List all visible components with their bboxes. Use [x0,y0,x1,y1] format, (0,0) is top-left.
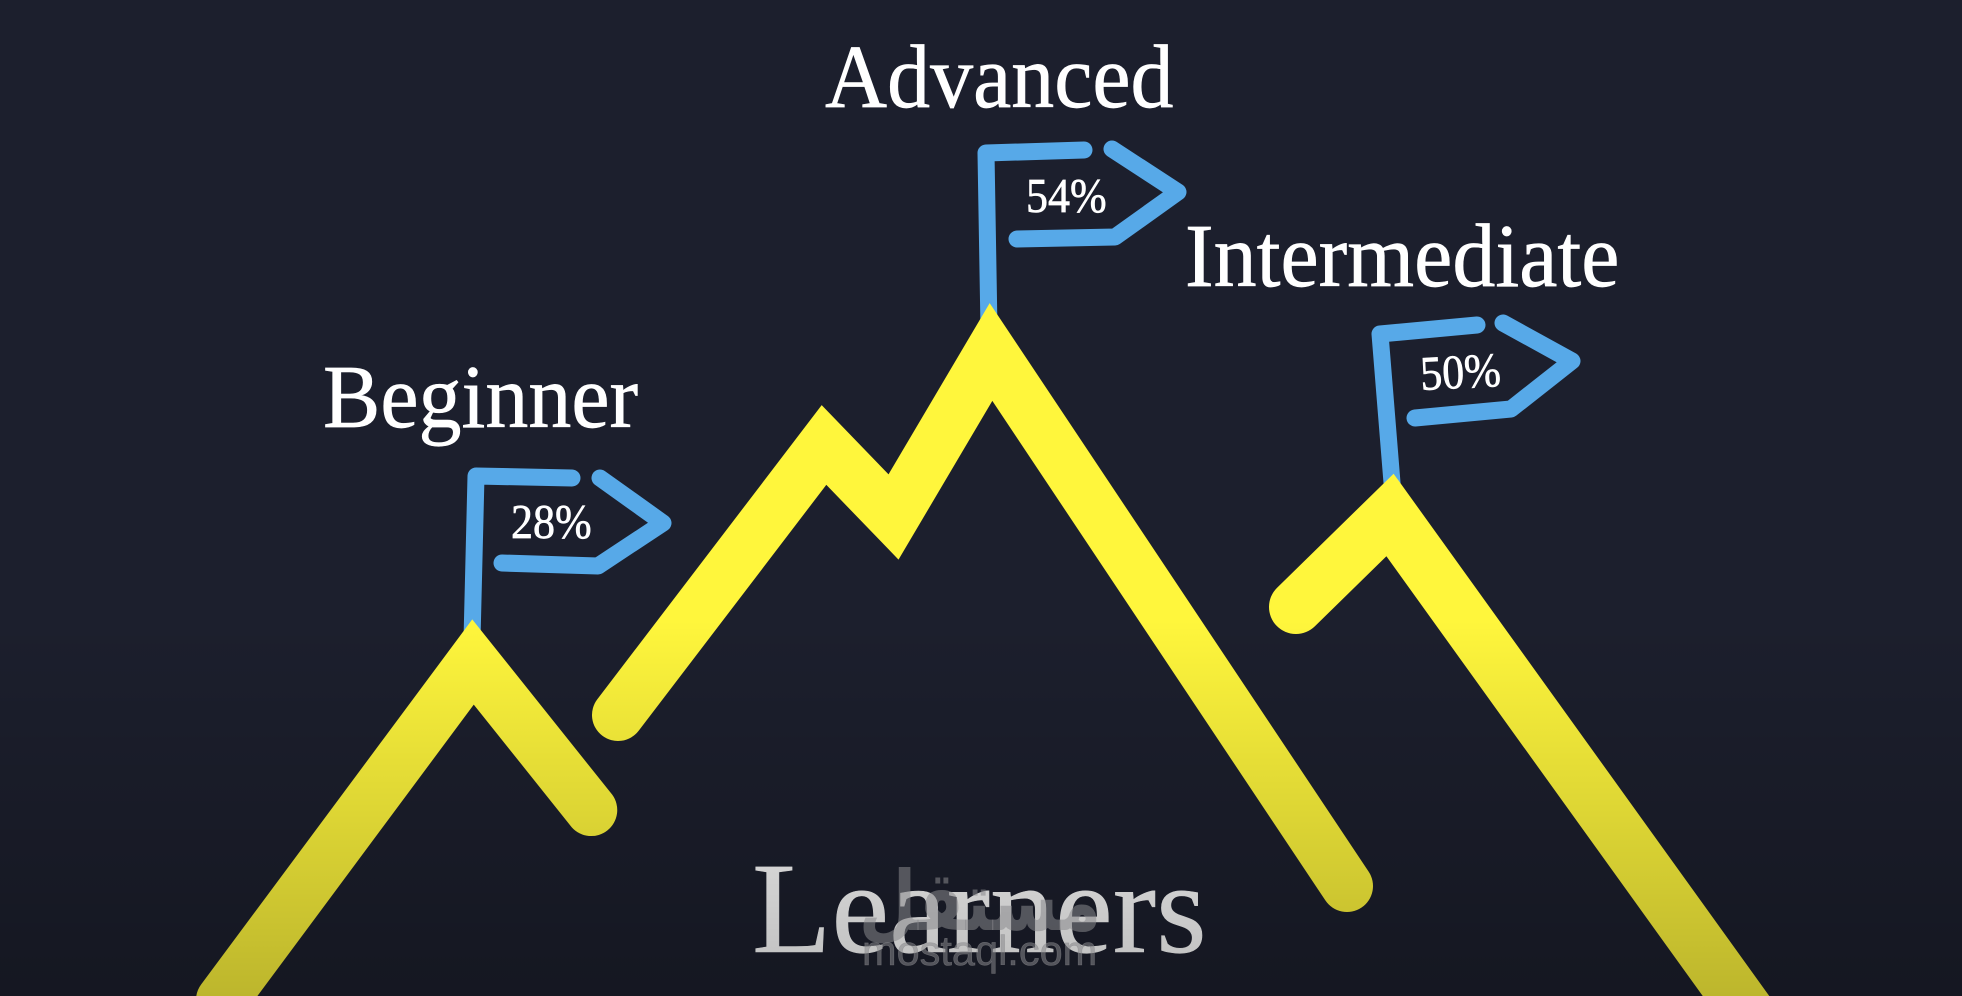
mountain: beginner peak [196,619,617,996]
heading: Beginner: Beginner [323,347,638,447]
watermark: mostaql.com [862,927,1097,974]
mountain: advanced peak [618,352,1347,886]
value: 50%: 50% [1419,344,1502,401]
value: 28%: 28% [511,496,592,550]
watermark: مستقل [859,853,1101,950]
flag: advanced 54% [986,149,1178,330]
flag: beginner 28% [472,476,663,640]
value: 54%: 54% [1026,170,1107,224]
heading: Intermediate: Intermediate [1185,206,1619,306]
mountain: intermediate peak [1269,474,1769,996]
heading: Advanced: Advanced [825,27,1174,127]
bottom fade overlay [0,620,1962,996]
flag: intermediate 50% [1380,323,1572,495]
title: Learners: Learners [752,837,1207,981]
